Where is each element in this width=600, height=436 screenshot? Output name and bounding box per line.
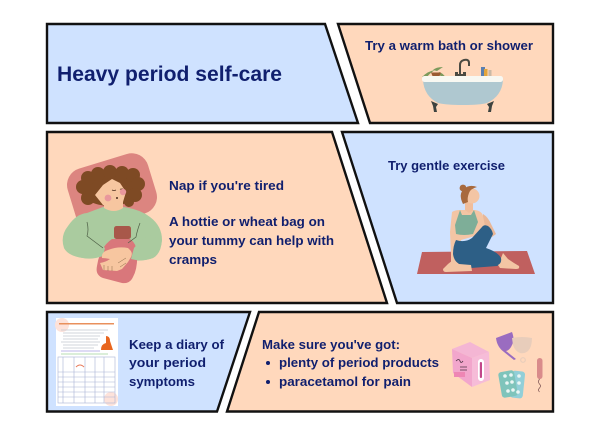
text: hottie advice: your tummy can help with (169, 234, 334, 248)
title: Heavy period self-care (57, 63, 282, 86)
sleeve creases (87, 222, 140, 248)
torso and near arm (450, 210, 485, 270)
text: supplies list (262, 338, 439, 389)
lower sleeves (64, 230, 162, 260)
crop top (455, 210, 478, 235)
heading: bath: Try a warm bath or shower (365, 39, 533, 53)
pillow (63, 149, 161, 233)
bottles (481, 67, 485, 77)
feet (443, 253, 519, 272)
text: supplies list: Make sure you've got: (262, 338, 400, 352)
text: nap: Nap if you're tired (169, 179, 284, 193)
text: diary: Keep a diary of (129, 338, 225, 352)
sweater (63, 207, 162, 261)
hair (76, 165, 145, 207)
image: diary sheet (55, 318, 118, 406)
icon: pad box (452, 342, 490, 387)
mat (417, 251, 535, 274)
heading: exercise: Try gentle exercise (388, 159, 505, 173)
illustration: yoga pose (417, 185, 535, 274)
panel: title (47, 24, 358, 123)
tap (460, 60, 469, 76)
text: diary: symptoms (129, 375, 195, 389)
panel: warm bath (338, 24, 553, 123)
bottle cap (114, 226, 131, 239)
illustration: woman with hot water bottle (63, 149, 162, 283)
icon: menstrual cups (496, 332, 532, 362)
plant (422, 67, 446, 78)
text: diary (129, 338, 225, 389)
leggings (453, 225, 502, 268)
far arm (483, 214, 496, 237)
hair (461, 186, 477, 204)
hot water bottle (97, 239, 137, 283)
neck and head (465, 200, 473, 213)
hands (100, 247, 132, 271)
icon: blister packs (498, 370, 525, 399)
text: hottie advice: cramps (169, 253, 217, 267)
icon: tampon (537, 358, 542, 392)
text: supplies list: paracetamol for pain (279, 375, 411, 389)
panel: nap and hot water bottle (47, 132, 387, 303)
text: hottie advice: A hottie or wheat bag on (169, 215, 325, 229)
panel: gentle exercise (342, 132, 553, 303)
tub (423, 80, 503, 105)
icon: bathtub (422, 60, 503, 112)
text: hottie advice (169, 215, 334, 267)
face (95, 179, 126, 206)
panel: supplies (227, 312, 553, 412)
neck (104, 201, 123, 211)
panel: symptom diary (47, 312, 250, 412)
text: supplies list: plenty of period products (279, 356, 439, 370)
text: diary: your period (129, 356, 206, 370)
